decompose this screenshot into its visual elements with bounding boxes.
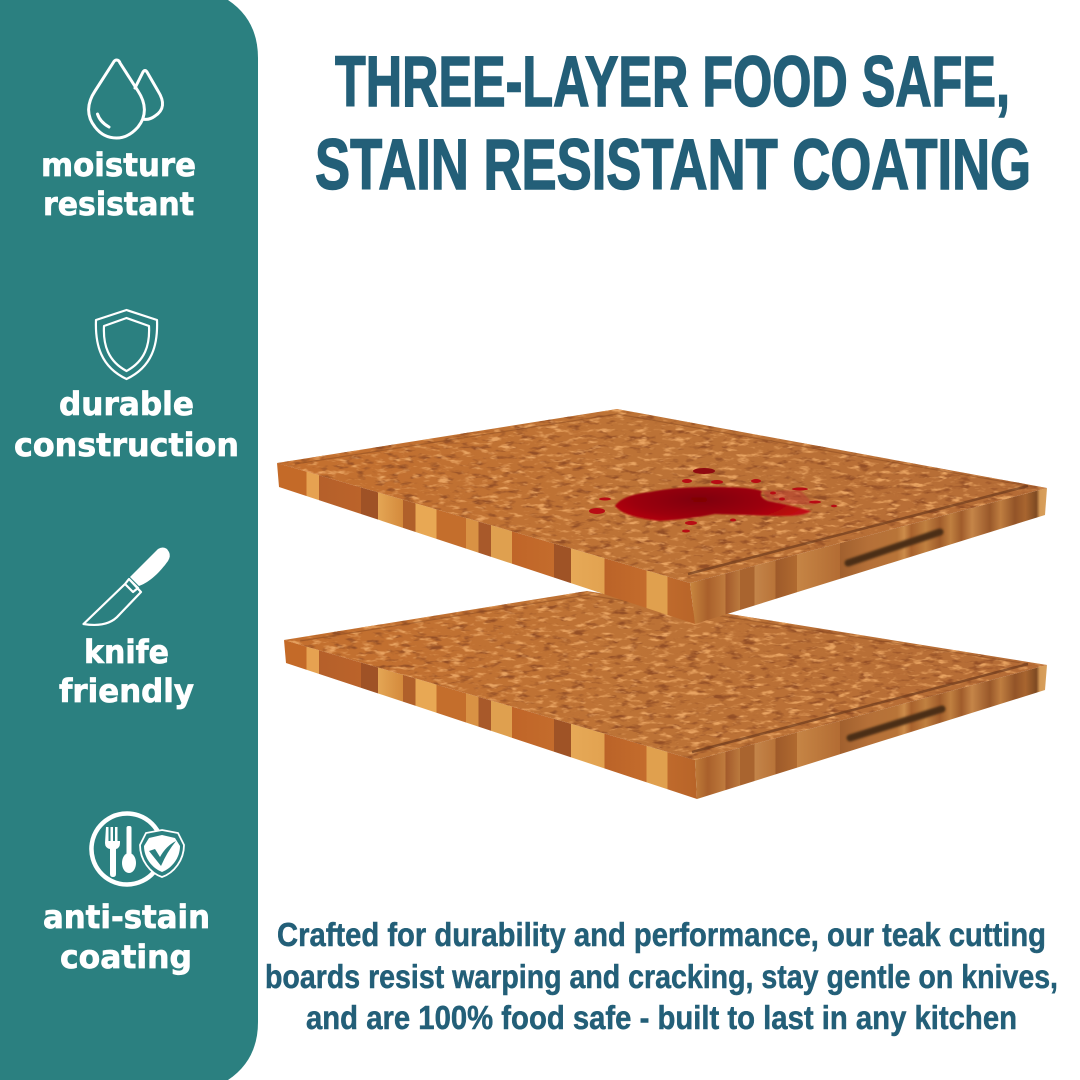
label: knife friendly: friendly xyxy=(59,672,194,710)
label: moisture resistant: moisture xyxy=(41,146,196,184)
label: durable construction: durable xyxy=(59,385,194,423)
label: moisture resistant: resistant xyxy=(43,185,194,223)
title xyxy=(315,43,1031,205)
label: knife friendly: knife xyxy=(84,633,169,671)
icon: water drops xyxy=(89,60,163,138)
icon: shield xyxy=(96,310,157,379)
icon: cutlery with shield check xyxy=(91,813,184,884)
label: moisture resistant xyxy=(41,146,196,223)
lower cutting board xyxy=(284,591,1047,799)
body text xyxy=(265,916,1058,1036)
upper cutting board with stain xyxy=(277,409,1047,624)
icon: knife xyxy=(84,548,170,625)
label: anti-stain coating xyxy=(43,898,210,976)
label: anti-stain coating: anti-stain xyxy=(43,898,210,936)
label: durable construction: construction xyxy=(14,426,239,464)
label: anti-stain coating: coating xyxy=(60,938,192,976)
label: durable construction xyxy=(14,385,239,464)
label: knife friendly xyxy=(59,633,194,710)
red stain xyxy=(589,468,837,532)
panel: feature sidebar xyxy=(0,0,258,1080)
